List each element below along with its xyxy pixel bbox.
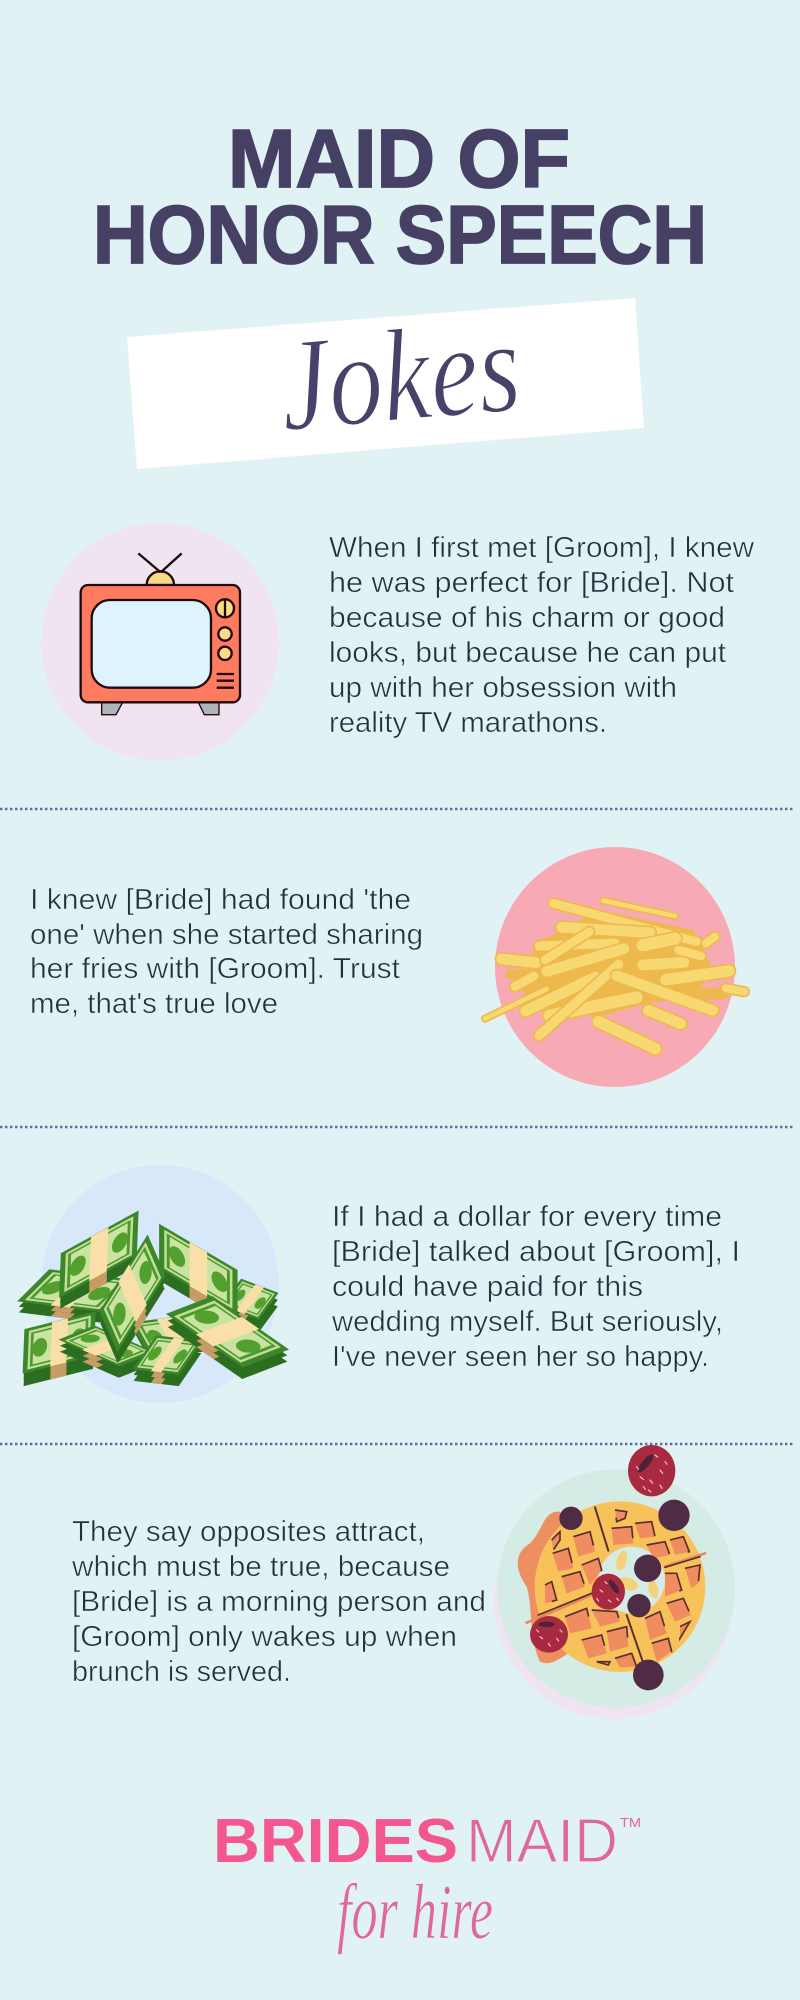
text: joke 1: looks, but because he can put (329, 637, 726, 669)
text: joke 4: brunch is served. (72, 1656, 291, 1688)
logo: Bridesmaid for hire: TM (620, 1815, 641, 1830)
logo: Bridesmaid for hire: MAID (466, 1807, 618, 1876)
logo: Bridesmaid for hire: for hire (337, 1868, 493, 1955)
text: joke 1: he was perfect for [Bride]. Not (329, 567, 734, 599)
text: joke 2: me, that's true love (30, 988, 278, 1020)
circle: lilac backdrop (41, 523, 279, 761)
text: joke 1 (329, 532, 754, 739)
text: joke 1: When I first met [Groom], I knew (329, 532, 754, 564)
logo: Bridesmaid for hire (213, 1807, 641, 1955)
panel: joke 3 (19, 1165, 740, 1403)
title: HONOR SPEECH (93, 188, 707, 281)
text: joke 2: one' when she started sharing (30, 919, 423, 951)
text: joke 4: They say opposites attract, (72, 1516, 425, 1548)
subtitle banner: Jokes (274, 292, 526, 459)
text: joke 3: If I had a dollar for every time (332, 1201, 722, 1233)
circle: blue backdrop (41, 1165, 279, 1403)
text: joke 3: could have paid for this (332, 1271, 643, 1303)
subtitle banner (127, 292, 644, 469)
text: joke 4: [Groom] only wakes up when (72, 1621, 457, 1653)
text: joke 3 (331, 1201, 740, 1373)
text: joke 2: her fries with [Groom]. Trust (30, 953, 400, 985)
text: joke 3: [Bride] talked about [Groom], I (332, 1236, 740, 1268)
text: joke 3: I've never seen her so happy. (332, 1341, 709, 1373)
text: joke 2 (30, 884, 423, 1020)
icon: pile of cash (19, 1212, 287, 1386)
title (93, 112, 707, 281)
text: joke 1: because of his charm or good (329, 602, 725, 634)
icon: french fries (485, 901, 744, 1049)
title: MAID OF (228, 112, 570, 205)
icon: television (81, 553, 240, 715)
panel: joke 2 (30, 847, 744, 1087)
text: joke 4: [Bride] is a morning person and (72, 1586, 486, 1618)
logo: Bridesmaid for hire: BRIDES (213, 1807, 458, 1876)
text: joke 1: reality TV marathons. (329, 707, 607, 739)
circle: pink backdrop (495, 847, 735, 1087)
icon: waffle on a plate (494, 1445, 735, 1719)
text: joke 2: I knew [Bride] had found 'the (30, 884, 411, 916)
panel: joke 4 (71, 1445, 735, 1719)
panel: joke 1 (41, 523, 754, 761)
text: joke 4: which must be true, because (71, 1551, 450, 1583)
text: joke 4 (71, 1516, 486, 1688)
text: joke 1: up with her obsession with (329, 672, 677, 704)
text: joke 3: wedding myself. But seriously, (331, 1306, 723, 1338)
